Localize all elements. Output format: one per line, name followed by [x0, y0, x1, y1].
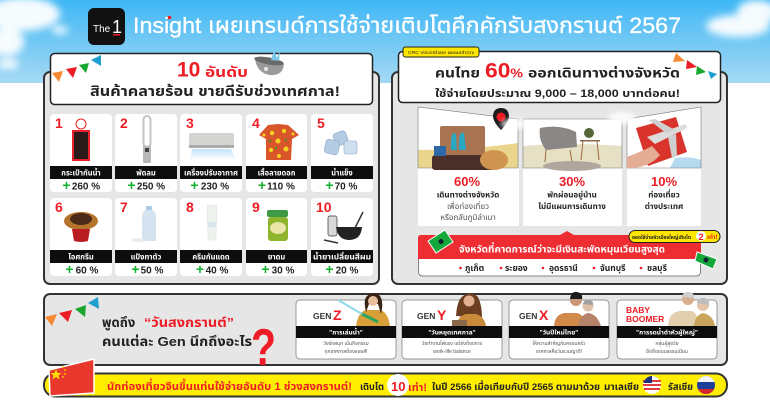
- product card 1: กระเป๋ากันน้ำ: [61, 168, 101, 178]
- card: Baby Boomer: [617, 292, 717, 359]
- card: Gen X: GEN: [519, 311, 537, 321]
- product card 4: 110 %: [267, 182, 295, 192]
- option: 10 percent overseas: [627, 107, 701, 226]
- product card 6: ไอศกรีม: [68, 252, 94, 262]
- product card 1: 1: [55, 115, 63, 131]
- banner: Chinese tourists: เท่า!: [408, 381, 427, 394]
- card: Gen X: [509, 292, 609, 359]
- product card 1: 260 %: [72, 182, 100, 192]
- option: 60 percent domestic travel: เพื่อท่องเที่ยว: [447, 200, 489, 211]
- title: Insight เผยเทรนด์การใช้จ่ายเติบโตคึกคักรับสงกรานต์ 2567: [133, 13, 681, 38]
- product card 8: 8: [186, 199, 194, 215]
- product card 7: +: [131, 261, 140, 277]
- card: Gen Z: Z: [333, 307, 342, 323]
- banner: Chinese tourists: มาเลเซีย: [604, 382, 639, 393]
- heading: 60 percent travel: คนไทย: [435, 66, 480, 80]
- heading: 60 percent travel: 60%: [485, 60, 523, 82]
- card: Gen Y: "วันหยุดเทศกาล": [428, 328, 476, 338]
- tag: big-city spending doubled: [629, 230, 720, 243]
- card: Gen Z: GEN: [313, 311, 331, 321]
- product card 2: พัดลม: [136, 168, 156, 178]
- icon: banknote left: [428, 230, 453, 253]
- product card 3: 3: [186, 115, 194, 131]
- product card 10: +: [325, 261, 334, 277]
- tag: CRC VoiceShare: [403, 47, 479, 57]
- card: Baby Boomer: BABY: [626, 305, 650, 315]
- card: Gen Z: ทุกเทศกาลต้องจอยส์!: [324, 348, 368, 355]
- product card 2: +: [127, 177, 136, 193]
- product card 3: เครื่องปรับอากาศ: [184, 168, 238, 178]
- product card 2: 2: [120, 115, 128, 131]
- product card 10: น้ำยาเปลี่ยนสีผม: [313, 251, 371, 262]
- list: provinces: ชลบุรี: [647, 263, 668, 273]
- heading: 60 percent travel: ใช้จ่ายโดยประมาณ 9,000 – 18,000 บาทต่อคน!: [435, 87, 680, 100]
- product card 8: ครีมกันแดด: [192, 252, 230, 262]
- card: Baby Boomer: BOOMER: [626, 314, 664, 324]
- list: provinces: ระยอง: [505, 263, 528, 273]
- card: Gen X: ให้ความสำคัญกับครอบครัว: [533, 340, 586, 347]
- card: Gen Z: วัยรักสนุก เน้นกิจกรรม: [323, 340, 369, 347]
- panel: generations: [44, 292, 727, 377]
- card: Baby Boomer: ยึดถือขนบธรรมเนียม: [646, 348, 688, 355]
- card: Gen Y: GEN: [417, 311, 435, 321]
- tag: big-city spending doubled: เท่า!: [707, 233, 718, 241]
- product card 10: 20 %: [336, 266, 359, 276]
- banner: Chinese tourists: รัสเซีย: [668, 382, 693, 393]
- list: provinces: อุดรธานี: [549, 263, 578, 273]
- logo: The 1: The: [93, 24, 111, 35]
- icon: tower fan: [143, 116, 151, 163]
- card: Baby Boomer: กลุ่มผู้สูงวัย: [655, 340, 679, 347]
- card: Gen Y: work-life balance: [433, 349, 471, 355]
- list: provinces: ภูเก็ต: [465, 263, 484, 273]
- product card 5: +: [325, 177, 334, 193]
- product card 5: 5: [317, 115, 325, 131]
- tag: big-city spending doubled: 2: [698, 232, 704, 243]
- option: 60 percent domestic travel: หรือกลับภูมิลำเนา: [440, 212, 496, 223]
- option: 10 percent overseas: ท่องเที่ยว: [648, 188, 680, 200]
- product card 6: +: [65, 261, 74, 277]
- product card 2: [115, 114, 177, 193]
- product card 4: 4: [252, 115, 260, 131]
- product card 6: 60 %: [76, 266, 99, 276]
- product card 1: [50, 114, 112, 193]
- icon: sunscreen tube: [207, 205, 217, 240]
- banner: Chinese tourists: ในปี 2566 เมื่อเทียบกับปี 2565 ตามมาด้วย: [432, 380, 600, 393]
- logo: The 1: 1: [112, 17, 122, 37]
- product card 1: +: [62, 177, 71, 193]
- panel: Thai travel survey: [44, 47, 727, 396]
- product card 9: +: [261, 261, 270, 277]
- product card 7: [115, 198, 177, 277]
- card: Gen Z: "การเล่นน้ำ": [329, 328, 363, 336]
- icon: ice cubes: [324, 130, 357, 155]
- product card 3: +: [190, 177, 199, 193]
- product card 3: 230 %: [201, 182, 229, 192]
- card: Gen X: X: [539, 307, 549, 323]
- icon: balm jar: [267, 210, 288, 241]
- heading: what each gen thinks: [102, 315, 252, 349]
- image: gen Z person: [338, 293, 390, 326]
- product card 6: [50, 198, 112, 277]
- product card 7: 50 %: [141, 266, 164, 276]
- card: Gen Y: วัยทำงานไฟแรง แต่ยังต้องการ: [422, 340, 483, 347]
- icon: party bunting right: [673, 53, 717, 79]
- icon: floral shirt: [259, 124, 299, 160]
- image: gen Y person: [452, 293, 486, 326]
- callout: top spending provinces: [418, 230, 720, 276]
- list: provinces: [459, 263, 668, 273]
- decorative clouds over images: [501, 112, 636, 129]
- heading: top 10 products: 10: [177, 58, 200, 82]
- list: provinces: จันทบุรี: [600, 263, 626, 273]
- option: 30 percent stay home: พักผ่อนอยู่บ้าน: [547, 188, 597, 200]
- tag: big-city spending doubled: ยอดใช้จ่ายหัวเมืองใหญ่เติบโต: [632, 233, 691, 241]
- card: Gen Y: [402, 293, 502, 359]
- icon: water bowl: [254, 50, 284, 75]
- card: Gen X: "วันปีใหม่ไทย": [540, 328, 578, 336]
- product card 7: 7: [120, 199, 128, 215]
- heading: what each gen thinks: “วันสงกรานต์”: [144, 315, 234, 330]
- product card 4: [246, 114, 307, 193]
- card: Gen X: เทศกาลคือวันรวมญาติ!: [536, 348, 582, 355]
- heading: 60 percent travel: [398, 52, 720, 102]
- product card 6: 6: [55, 199, 63, 215]
- sky background: [0, 0, 770, 83]
- option: 10 percent overseas: ต่างประเทศ: [645, 200, 683, 211]
- product card 3: [180, 114, 242, 193]
- icon: waterproof bag: [73, 119, 89, 160]
- card: Baby Boomer: "การรดน้ำดำหัวผู้ใหญ่": [636, 328, 698, 336]
- icon: party bunting left: [52, 55, 101, 82]
- product card 8: 40 %: [206, 266, 229, 276]
- product card 4: +: [258, 177, 266, 193]
- icon: banknote right: [695, 252, 717, 269]
- option: 30 percent stay home: ไม่มีแผนการเดินทาง: [538, 200, 606, 211]
- image: suitcase: [418, 107, 518, 170]
- icon: air conditioner: [189, 133, 236, 160]
- product card 10: 10: [316, 199, 332, 215]
- icon: powder bottle: [131, 206, 156, 242]
- banner: Chinese tourists: เติบโต: [360, 382, 384, 393]
- product card 9: ยาดม: [268, 252, 285, 262]
- heading: 60 percent travel: ออกเดินทางต่างจังหวัด: [528, 66, 680, 80]
- product card 5: 70 %: [335, 182, 358, 192]
- banner: Chinese tourists: นักท่องเที่ยวจีนขึ้นแท่นใช้จ่ายอันดับ 1 ช่วงสงกรานต์!: [107, 378, 352, 393]
- image: armchair: [523, 119, 622, 171]
- product card 5: น้ำแข็ง: [331, 168, 353, 178]
- card: Gen Z: [296, 293, 396, 359]
- icon: China flag: [49, 359, 94, 396]
- icon: ice cream cup: [64, 212, 98, 242]
- icon: party bunting bottom: [45, 297, 99, 326]
- option: 60 percent domestic travel: [418, 107, 519, 226]
- icon: Malaysia flag: [643, 376, 661, 394]
- product card 9: [246, 198, 307, 277]
- option: 30 percent stay home: [523, 119, 622, 226]
- banner: Chinese tourists: [44, 359, 727, 396]
- image: passport and plane: [627, 107, 701, 168]
- heading: top 10 products: สินค้าคลายร้อน ขายดีรับช่วงเทศกาล!: [90, 83, 340, 99]
- product card 7: แป้งทาตัว: [131, 252, 161, 262]
- image: gen X family: [554, 292, 601, 326]
- tag: CRC VoiceShare: CRC VoiceShare เผยผลสำรวจ: [408, 49, 475, 55]
- icon: starburst 10x: [387, 374, 409, 396]
- product card 4: เสื้อลายดอก: [258, 168, 296, 178]
- icon: question mark: ?: [251, 319, 276, 377]
- heading: top 10 products: [50, 54, 372, 104]
- callout: top spending provinces: จังหวัดที่คาดการณ์ว่าจะมีเงินสะพัดหมุนเวียนสูงสุด: [459, 241, 665, 256]
- product card 2: 250 %: [137, 182, 165, 192]
- product card 10: [311, 198, 373, 277]
- product card 8: +: [196, 261, 204, 277]
- icon: hair dye set: [324, 212, 363, 243]
- option: 10 percent overseas: 10%: [651, 174, 677, 189]
- heading: what each gen thinks: คนแต่ละ Gen นึกถึงอะไร: [102, 334, 252, 349]
- product card 8: [180, 198, 242, 277]
- product card 9: 9: [252, 199, 260, 215]
- image: elderly couple: [668, 292, 715, 326]
- option: 60 percent domestic travel: เดินทางต่างจังหวัด: [437, 188, 499, 200]
- icon: starburst 10x: 10: [391, 379, 405, 394]
- option: 30 percent stay home: 30%: [559, 174, 585, 189]
- icon: Russia flag: [697, 376, 715, 394]
- heading: top 10 products: อันดับ: [205, 64, 248, 80]
- product card 5: [311, 114, 373, 193]
- product card 9: 30 %: [272, 266, 295, 276]
- heading: what each gen thinks: พูดถึง: [102, 315, 135, 331]
- logo: The 1: [88, 8, 125, 45]
- icon: map pin: [493, 108, 509, 130]
- card: Gen Y: Y: [437, 307, 447, 323]
- panel: top 10 products: [44, 50, 379, 284]
- option: 60 percent domestic travel: 60%: [454, 174, 480, 189]
